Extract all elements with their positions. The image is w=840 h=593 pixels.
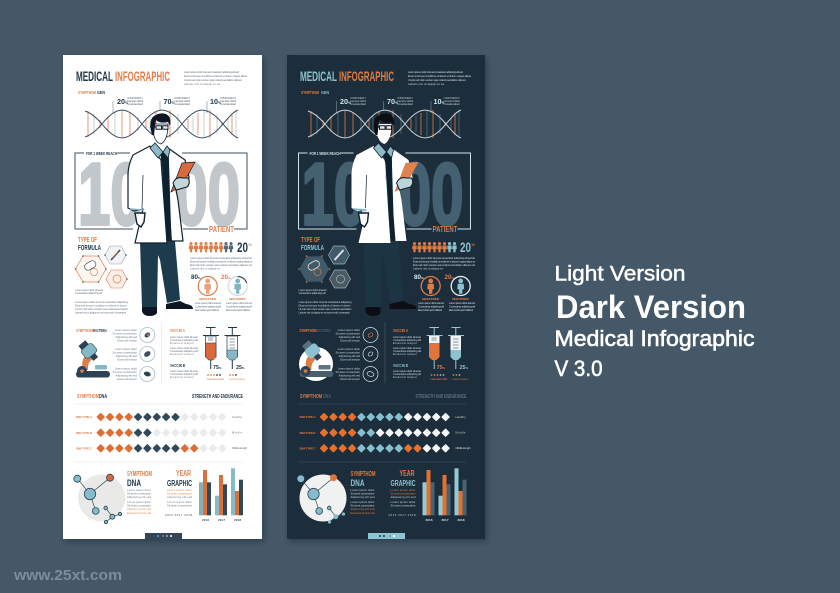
- vaccine percentages: 75: [436, 365, 442, 371]
- title: [300, 68, 394, 84]
- dna callouts: COMPONENT 2: [397, 96, 414, 100]
- heading: symptom bacteria: SYMPTHOM: [300, 328, 317, 334]
- formula text: Ut enim ad minim veniam quis nostrud exercitation: [75, 307, 128, 311]
- donut stats: 80: [414, 274, 421, 281]
- dna helix: [85, 110, 238, 138]
- donut stats: Consectetur adipiscing elit: [449, 304, 475, 308]
- donut stats: Consectetur adipiscing elit: [418, 304, 444, 308]
- dna callouts: %: [442, 101, 446, 105]
- donut stats: Lorem ipsum dolor sit amet: [226, 301, 252, 305]
- formula text: Laboris nisi ut aliquip ex ea commodo consequat: [75, 310, 126, 314]
- heading: type of formula: TYPE OF: [301, 235, 320, 244]
- bar chart: 2016: [426, 518, 433, 522]
- bacteria text: Eiusmod tempor: [340, 338, 360, 342]
- caption: dark version: Dark Version: [556, 289, 746, 325]
- bacteria text: Sit amet consectetur: [336, 370, 360, 374]
- intro text: Laboris nisi ut aliquip ex ea: [184, 82, 220, 86]
- patient text: Enim ad minim veniam quis nostrud exercitation ullamco nisi: [190, 263, 252, 267]
- patient text: Eiusmod tempor incididunt ut labore et dolore magna aliqua ut: [190, 260, 252, 264]
- dna callouts: COMPONENT 3: [220, 96, 236, 100]
- symptom dna text: Adipiscing elit sed: [127, 507, 152, 511]
- dna callouts: Consectetur elit sed: [174, 102, 190, 106]
- vaccin text: Lorem ipsum dolor sit amet: [393, 335, 421, 339]
- vaccin text: VACCIN B: [393, 363, 408, 369]
- formula text: Eiusmod tempor incididunt ut labore et dolore: [75, 304, 128, 308]
- vaccin text: Lorem ipsum dolor sit amet: [393, 369, 421, 373]
- year graphic text: YEAR: [400, 469, 415, 478]
- vaccin text: Eiusmod tempor: [170, 352, 194, 356]
- people pictogram: [189, 242, 233, 252]
- donut stats: SICK PATIENT: [452, 297, 469, 301]
- bacteria text: Eiusmod tempor: [117, 358, 137, 362]
- bar chart: 2017: [218, 518, 225, 522]
- bacteria text: Adipiscing elit sed: [338, 374, 361, 378]
- bacteria text: Lorem ipsum dolor: [115, 328, 137, 332]
- symptom dna text: Adipiscing elit sed: [350, 507, 375, 511]
- vaccin text: Consectetur adipiscing elit: [170, 338, 198, 342]
- diamond chart: Healthy: [232, 415, 243, 419]
- donut stats: %: [198, 276, 201, 280]
- symptom dna text: SYMPTHOM: [127, 471, 152, 478]
- bacteria icons: [140, 328, 155, 382]
- vaccin text: Consectetur adipiscing elit: [170, 349, 198, 353]
- dna callouts: Consectetur elit sed: [220, 102, 236, 106]
- heading: symptom bacteria: SYMPTHOM: [76, 328, 93, 334]
- bacteria icons: [363, 328, 378, 382]
- year graphic text: Sit amet consectetur: [390, 504, 416, 508]
- bar chart: [199, 468, 243, 522]
- dna callouts: Lorem ipsum dolor sit: [444, 99, 460, 103]
- year graphic text: GRAPHIC: [390, 479, 416, 488]
- vaccin text: Lorem ipsum dolor sit amet: [170, 346, 198, 350]
- formula text: Lorem ipsum dolor sit amet consectetur adipiscing: [75, 300, 128, 304]
- heading: type of formula: [78, 235, 101, 252]
- caption: light version: Light Version: [554, 262, 686, 286]
- patient text: Lorem ipsum dolor sit amet consectetur adipiscing elit sed do: [413, 256, 476, 260]
- symptom dna text: SYMPTHOM: [350, 471, 376, 478]
- donut stats: Lorem ipsum dolor sit amet: [418, 301, 444, 305]
- symptom dna text: Sit amet consectetur: [350, 492, 375, 496]
- patient text: Lorem ipsum dolor sit amet consectetur adipiscing elit sed do: [190, 256, 252, 260]
- diamond chart: Middle: [456, 430, 466, 434]
- symptom dna text: Sit amet consectetur: [350, 504, 375, 508]
- symptom dna text: DNA: [127, 478, 141, 488]
- dna callouts: COMPONENT 3: [444, 96, 460, 100]
- stat: 20 percent: 20: [460, 239, 471, 255]
- vaccin text: Eiusmod tempor: [393, 375, 417, 379]
- vaccine percentages: 25: [236, 365, 242, 371]
- vaccin text: VACCIN A: [170, 328, 185, 334]
- syringe A: [203, 328, 219, 369]
- dna callouts: Lorem ipsum dolor sit: [397, 99, 413, 103]
- donut stats: Eiusmod tempor incididunt: [418, 308, 442, 312]
- dna callouts: Lorem ipsum dolor sit: [350, 99, 366, 103]
- year graphic text: Sit amet consectetur: [390, 492, 416, 496]
- symptom dna text: Adipiscing elit sed: [127, 495, 152, 499]
- heading: symptom gen: GEN: [321, 90, 330, 95]
- reach frame: FOR 1 WEEK REACH: [310, 151, 341, 157]
- diamond chart: [300, 414, 471, 452]
- formula text: Lorem ipsum dolor sit amet: [75, 288, 103, 292]
- vaccine percentages: %: [242, 366, 245, 370]
- heading: symptom dna: DNA: [323, 394, 331, 400]
- heading: symptom bacteria: BACTERIA: [317, 328, 331, 334]
- pager: [145, 533, 182, 539]
- donut stats: %: [452, 276, 454, 280]
- diamond chart: DNA TYPE B: [76, 431, 93, 435]
- diamond chart: DNA TYPE C: [76, 446, 93, 450]
- diamond chart: DNA TYPE B: [300, 431, 316, 435]
- patient text: Enim ad minim veniam quis nostrud exercitation ullamco nisi: [413, 263, 475, 267]
- syringe B: [224, 328, 240, 369]
- dna callouts: %: [395, 101, 399, 105]
- vaccine percentages: 25: [460, 365, 466, 371]
- heading: symptom gen: SYMPTHOM: [301, 90, 319, 95]
- dna callouts: Lorem ipsum dolor sit: [127, 99, 143, 103]
- dna callouts: COMPONENT 1: [350, 96, 366, 100]
- heading: type of formula: TYPE OF: [78, 235, 97, 244]
- patient text: Laboris nisi ut aliquip ex: [190, 266, 221, 270]
- dna callouts: 10: [210, 99, 218, 106]
- molecule diagram: [74, 474, 125, 524]
- reach frame: PATIENT: [209, 225, 234, 234]
- donut stats: %: [228, 276, 231, 280]
- year graphic text: Lorem ipsum dolor: [167, 500, 192, 504]
- year graphic text: Adipiscing elit sed: [390, 495, 416, 499]
- dna callouts: 70: [387, 99, 395, 106]
- formula text: Ut enim ad minim veniam quis nostrud exercitation: [298, 307, 352, 311]
- symptom dna text: Lorem ipsum dolor: [127, 488, 151, 492]
- diamond chart: DNA TYPE A: [300, 415, 316, 419]
- molecule diagram: [297, 474, 346, 524]
- heading: type of formula: FORMULA: [78, 243, 101, 252]
- vaccine percentages: Lorem ipsum: [229, 377, 246, 381]
- year graphic text: GRAPHIC: [167, 479, 192, 488]
- microscope: [76, 338, 110, 378]
- bacteria text: Adipiscing elit sed: [338, 354, 361, 358]
- patient text: [413, 256, 476, 270]
- symptom dna text: Sit amet consectetur: [127, 492, 151, 496]
- patient text: Eiusmod tempor incididunt ut labore et dolore magna aliqua ut: [413, 260, 475, 264]
- bar chart: 2018: [458, 518, 465, 522]
- title: INFOGRAPHIC: [339, 68, 394, 84]
- dna callouts: 70: [164, 99, 172, 106]
- vaccin text: Lorem ipsum dolor sit amet: [393, 346, 421, 350]
- title: INFOGRAPHIC: [115, 68, 170, 84]
- vaccin text: Lorem ipsum dolor sit amet: [170, 335, 198, 339]
- bacteria text: Lorem ipsum dolor: [338, 347, 360, 351]
- dna callouts: %: [218, 101, 222, 105]
- bacteria text: Lorem ipsum dolor: [115, 366, 137, 370]
- vaccine percentages: [207, 365, 246, 381]
- stat: 20 percent: %: [472, 242, 476, 247]
- donut stats: Eiusmod tempor incididunt: [226, 308, 250, 312]
- vaccine percentages: 75: [213, 365, 219, 371]
- vaccine percentages: Lorem ipsum dolor: [430, 377, 448, 381]
- donut stats: Eiusmod tempor incididunt: [195, 308, 219, 312]
- symptom dna text: Eiusmod tempor elit: [127, 511, 151, 515]
- bacteria text: Sit amet consectetur: [336, 332, 360, 336]
- year graphic text: YEAR: [176, 469, 191, 478]
- bar chart: 2017: [442, 518, 449, 522]
- dna callouts: 20: [117, 99, 125, 106]
- bacteria text: Eiusmod tempor: [117, 338, 137, 342]
- symptom dna text: Lorem ipsum dolor: [127, 500, 151, 504]
- vaccin text: VACCIN B: [170, 363, 185, 369]
- bacteria text: Adipiscing elit sed: [115, 354, 138, 358]
- donut stats: 20: [221, 274, 228, 281]
- bar chart: 2016: [202, 518, 209, 522]
- symptom dna text: [127, 471, 152, 515]
- bacteria text: Lorem ipsum dolor: [338, 366, 360, 370]
- diamond chart: Healthy: [456, 415, 466, 419]
- donut stats: %: [421, 276, 424, 280]
- donut stats: SICK PATIENT: [229, 297, 246, 301]
- year graphic text: [165, 469, 192, 517]
- vaccine percentages: %: [442, 366, 446, 370]
- symptom dna text: Eiusmod tempor elit: [350, 511, 375, 515]
- bacteria text: Eiusmod tempor: [117, 377, 137, 381]
- bacteria text: Eiusmod tempor: [340, 377, 360, 381]
- heading: symptom bacteria: BACTERIA: [93, 328, 107, 334]
- people pictogram: [412, 242, 457, 252]
- vaccine percentages: Lorem ipsum dolor: [207, 377, 224, 381]
- formula text: Eiusmod tempor incididunt ut labore et dolore: [298, 304, 351, 308]
- big number 10000: 10000: [78, 144, 240, 244]
- donut stats: HEALTHY MAN: [422, 297, 439, 301]
- symptom dna text: [350, 471, 376, 515]
- intro text: Eiusmod tempor incididunt ut labore et dolore magna aliqua: [408, 74, 472, 78]
- bacteria text: Eiusmod tempor: [340, 358, 360, 362]
- bacteria text: Lorem ipsum dolor: [115, 347, 137, 351]
- caption: version number: V 3.0: [554, 356, 602, 381]
- caption: medical infographic: Medical Infographic: [554, 326, 754, 351]
- dna callouts: Consectetur elit sed: [397, 102, 414, 106]
- intro text: Eiusmod tempor incididunt ut labore et dolore magna aliqua: [184, 74, 248, 78]
- vaccin text: Consectetur adipiscing elit: [393, 338, 421, 342]
- formula text: [75, 288, 128, 314]
- heading: symptom gen: SYMPTHOM: [78, 90, 96, 95]
- vaccin text: Eiusmod tempor: [393, 341, 417, 345]
- syringe A: [426, 328, 442, 369]
- symptom dna text: Sit amet consectetur: [127, 504, 151, 508]
- bar chart: [422, 468, 466, 522]
- year graphic text: Lorem ipsum dolor: [167, 488, 192, 492]
- formula hexagons: [75, 246, 128, 288]
- year graphic text: 2016 2017 2018: [165, 513, 192, 517]
- donut stats: Consectetur adipiscing elit: [226, 304, 252, 308]
- patient text: Laboris nisi ut aliquip ex: [413, 266, 444, 270]
- formula text: Laboris nisi ut aliquip ex ea commodo consequat: [298, 310, 350, 314]
- donut stats: Consectetur adipiscing elit: [195, 304, 221, 308]
- dna callouts: Lorem ipsum dolor sit: [174, 99, 190, 103]
- donut stats: Lorem ipsum dolor sit amet: [195, 301, 221, 305]
- heading: symptom gen: GEN: [97, 90, 106, 95]
- reach frame: FOR 1 WEEK REACH: [86, 151, 117, 157]
- intro text: Lorem ipsum dolor sit amet consectetur adipiscing elit sed: [184, 70, 240, 74]
- panel: light version: [63, 55, 264, 542]
- dna callouts: %: [172, 101, 176, 105]
- donut stats: Eiusmod tempor incididunt: [449, 308, 473, 312]
- dna helix: [308, 110, 461, 138]
- vaccin text: [170, 328, 198, 379]
- heading: type of formula: [301, 235, 324, 252]
- year graphic text: 2016 2017 2018: [388, 513, 416, 517]
- bacteria text: Adipiscing elit sed: [338, 335, 361, 339]
- donut stats: [414, 274, 475, 312]
- reach frame: PATIENT: [432, 225, 458, 234]
- year graphic text: Sit amet consectetur: [167, 504, 192, 508]
- syringe B: [448, 328, 464, 369]
- bacteria text: [336, 328, 361, 381]
- pager: [368, 533, 405, 539]
- heading: symptom dna: SYMPTHOM: [77, 394, 99, 400]
- donut stats: 20: [444, 274, 452, 281]
- diamond chart: Middle strength: [232, 446, 248, 450]
- formula text: Consectetur adipiscing elit: [75, 291, 102, 295]
- vaccin text: Consectetur adipiscing elit: [393, 372, 421, 376]
- intro text: [408, 70, 472, 86]
- symptom dna text: Adipiscing elit sed: [350, 495, 375, 499]
- dna callouts: COMPONENT 2: [174, 96, 190, 100]
- heading: strength and endurance: STRENGTH AND ENDURANCE: [192, 394, 243, 400]
- bacteria text: Sit amet consectetur: [336, 350, 360, 354]
- big number 10000: 10000: [302, 144, 464, 244]
- patient text: [190, 256, 252, 270]
- vaccin text: VACCIN A: [393, 328, 408, 334]
- dna callouts: %: [125, 101, 129, 105]
- vaccin text: Lorem ipsum dolor sit amet: [170, 369, 198, 373]
- formula hexagons: [298, 246, 350, 288]
- formula text: Lorem ipsum dolor sit amet: [298, 288, 327, 292]
- bacteria text: Lorem ipsum dolor: [338, 328, 360, 332]
- vaccine percentages: [430, 365, 469, 381]
- year graphic text: Sit amet consectetur: [167, 492, 192, 496]
- bacteria text: Adipiscing elit sed: [115, 374, 138, 378]
- reach frame: [75, 151, 247, 234]
- dna callouts: Lorem ipsum dolor sit: [220, 99, 236, 103]
- year graphic text: [388, 469, 416, 517]
- bacteria text: Sit amet consectetur: [112, 350, 137, 354]
- bacteria text: Adipiscing elit sed: [115, 335, 138, 339]
- diamond chart: DNA TYPE C: [300, 446, 316, 450]
- dna callouts: %: [348, 101, 352, 105]
- diamond chart: DNA TYPE A: [76, 415, 93, 419]
- stat: 20 percent: %: [248, 242, 252, 247]
- symptom dna text: DNA: [350, 478, 365, 488]
- watermark: www.25xt.com: [13, 568, 122, 584]
- year graphic text: Adipiscing elit sed: [167, 495, 192, 499]
- formula text: Lorem ipsum dolor sit amet consectetur adipiscing: [298, 300, 352, 304]
- title: MEDICAL: [76, 68, 113, 84]
- title: [76, 68, 170, 84]
- heading: symptom dna: DNA: [99, 394, 107, 400]
- dna callouts: [336, 96, 460, 113]
- vaccin text: Consectetur adipiscing elit: [170, 372, 198, 376]
- dna callouts: Consectetur elit sed: [127, 102, 144, 106]
- intro text: Laboris nisi ut aliquip ex ea: [408, 82, 444, 86]
- year graphic text: Lorem ipsum dolor: [390, 500, 416, 504]
- heading: symptom dna: SYMPTHOM: [300, 394, 322, 400]
- microscope: [299, 338, 334, 381]
- donut stats: [191, 274, 252, 312]
- donut stats: Lorem ipsum dolor sit amet: [449, 301, 475, 305]
- dna callouts: 20: [340, 99, 348, 106]
- heading: strength and endurance: STRENGTH AND ENDURANCE: [416, 394, 467, 400]
- panel: dark version: [287, 55, 487, 542]
- heading: type of formula: FORMULA: [301, 243, 324, 252]
- diamond chart: [76, 414, 248, 452]
- vaccin text: Eiusmod tempor: [393, 352, 417, 356]
- donut stats: HEALTHY MAN: [199, 297, 216, 301]
- vaccine percentages: %: [466, 366, 468, 370]
- bacteria text: Sit amet consectetur: [112, 370, 137, 374]
- reach frame: [298, 151, 470, 234]
- bar chart: 2018: [234, 518, 241, 522]
- title: MEDICAL: [300, 68, 337, 84]
- formula text: Consectetur adipiscing elit: [298, 291, 326, 295]
- vaccin text: Consectetur adipiscing elit: [393, 349, 421, 353]
- year graphic text: Lorem ipsum dolor: [390, 488, 416, 492]
- bacteria text: Sit amet consectetur: [112, 332, 137, 336]
- intro text: Ut enim ad minim veniam quis nostrud exercitation ullamco: [408, 78, 466, 82]
- symptom dna text: Lorem ipsum dolor: [350, 500, 375, 504]
- vaccin text: Eiusmod tempor: [170, 375, 194, 379]
- doctor illustration: [352, 113, 418, 316]
- vaccin text: [393, 328, 421, 379]
- formula text: [298, 288, 352, 314]
- vaccine percentages: %: [219, 366, 222, 370]
- highlighted zero: [367, 165, 391, 222]
- dna callouts: COMPONENT 1: [127, 96, 144, 100]
- doctor illustration: [128, 113, 195, 316]
- dna callouts: [113, 96, 236, 113]
- vaccin text: Eiusmod tempor: [170, 341, 194, 345]
- intro text: Lorem ipsum dolor sit amet consectetur adipiscing elit sed: [408, 70, 464, 74]
- bacteria text: [112, 328, 138, 381]
- diamond chart: Middle: [232, 430, 242, 434]
- intro text: [184, 70, 248, 86]
- donut stats: 80: [191, 274, 198, 281]
- diamond chart: Middle strength: [456, 446, 471, 450]
- dna callouts: 10: [434, 99, 442, 106]
- stat: 20 percent: 20: [237, 239, 248, 255]
- dna callouts: Consectetur elit sed: [444, 102, 460, 106]
- vaccine percentages: Lorem ipsum: [452, 377, 469, 381]
- dna callouts: Consectetur elit sed: [350, 102, 366, 106]
- symptom dna text: Lorem ipsum dolor: [350, 488, 375, 492]
- intro text: Ut enim ad minim veniam quis nostrud exercitation ullamco: [184, 78, 242, 82]
